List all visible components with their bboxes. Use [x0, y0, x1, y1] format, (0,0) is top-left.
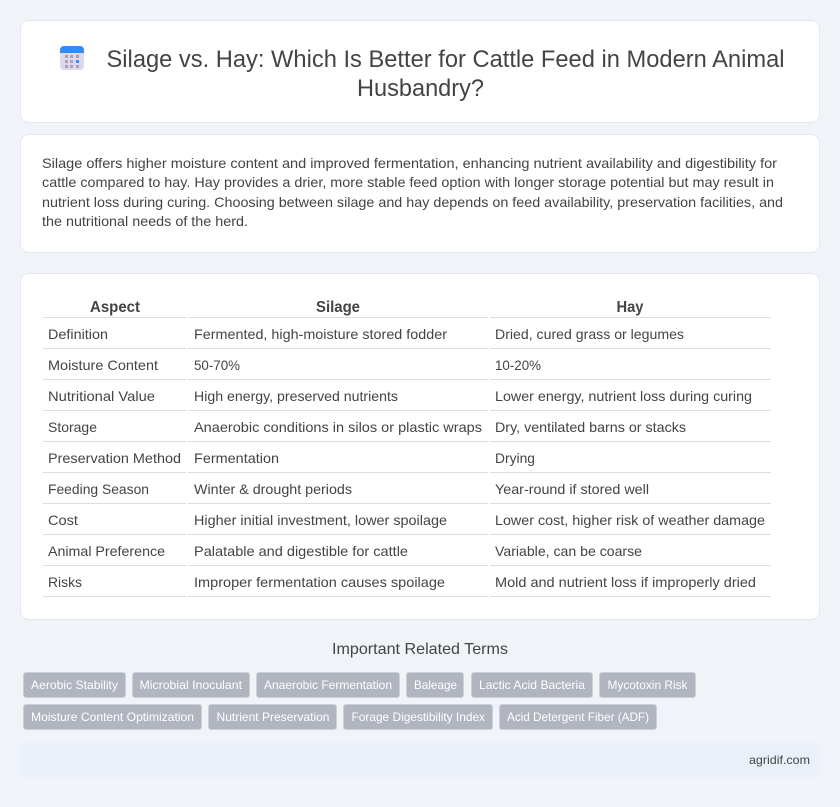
tag	[132, 672, 250, 698]
row: risks: Improper fermentation causes spoilage	[194, 574, 445, 590]
row: risks: Mold and nutrient loss if improperly dried	[495, 574, 756, 590]
row: cost: Lower cost, higher risk of weather damage	[495, 512, 765, 528]
row: risks: Risks	[48, 574, 82, 590]
row: animal preference: Variable, can be coarse	[495, 543, 642, 559]
row: nutritional value: Nutritional Value	[48, 388, 155, 404]
title: Silage vs. Hay: Which Is Better for Cattle Feed in Modern Animal	[106, 46, 784, 73]
row: feeding season: Year-round if stored well	[495, 481, 649, 497]
row: storage: Anaerobic conditions in silos or plastic wraps	[194, 419, 482, 435]
row: cost	[48, 512, 765, 528]
row: cost: Higher initial investment, lower spoilage	[194, 512, 447, 528]
row: nutritional value: Lower energy, nutrient loss during curing	[495, 388, 752, 404]
tag	[24, 672, 126, 698]
row: definition: Definition	[48, 326, 108, 342]
panel: summary paragraph	[20, 134, 820, 252]
row: animal preference: Animal Preference	[48, 543, 165, 559]
footer	[20, 743, 820, 777]
tag	[344, 704, 492, 730]
icon: calendar	[60, 46, 84, 70]
tag: Lactic Acid Bacteria	[479, 678, 585, 692]
table header	[90, 299, 644, 316]
tags: related terms	[24, 672, 696, 730]
row: definition: Fermented, high-moisture stored fodder	[194, 326, 447, 342]
row: moisture content: 10-20%	[495, 357, 541, 373]
row: storage	[48, 419, 686, 435]
table header: Hay	[616, 299, 644, 316]
row: moisture content	[48, 357, 541, 373]
tag: Anaerobic Fermentation	[264, 678, 392, 692]
row: animal preference	[48, 543, 642, 559]
row: preservation method	[48, 450, 535, 466]
tag: Mycotoxin Risk	[608, 678, 688, 692]
row: preservation method: Fermentation	[194, 450, 279, 466]
row: preservation method: Preservation Method	[48, 450, 181, 466]
tag	[472, 672, 592, 698]
panel: comparison table	[20, 274, 820, 620]
tag	[24, 704, 202, 730]
tag	[406, 672, 464, 698]
row: moisture content: Moisture Content	[48, 357, 158, 373]
row: definition	[48, 326, 684, 342]
tag: Baleage	[414, 678, 457, 692]
row: definition: Dried, cured grass or legumes	[495, 326, 684, 342]
tag: Acid Detergent Fiber (ADF)	[507, 710, 649, 724]
tag: Microbial Inoculant	[140, 678, 243, 692]
text block: summary: Silage offers higher moisture content and improved fermentation, enhancing nutrient availability and digestibility for	[42, 155, 777, 171]
row: feeding season: Feeding Season	[48, 481, 149, 497]
row: preservation method: Drying	[495, 450, 535, 466]
text block: summary: nutrient loss during curing. Choosing between silage and hay depends on feed availability, preservation facilities, and	[42, 194, 783, 210]
table header: Aspect	[90, 299, 141, 316]
tag	[256, 672, 400, 698]
tag	[208, 704, 336, 730]
title: Husbandry?	[357, 75, 484, 102]
row: storage: Storage	[48, 419, 97, 435]
panel: title header	[20, 20, 820, 122]
text block: summary: the nutritional needs of the herd.	[42, 213, 248, 229]
tag: Nutrient Preservation	[216, 710, 330, 724]
heading: important related terms: Important Related Terms	[332, 641, 508, 658]
tag: Moisture Content Optimization	[31, 710, 194, 724]
text block: summary: cattle compared to hay. Hay provides a drier, more stable feed option with longer storage potential but may result in	[42, 174, 774, 190]
row: cost: Cost	[48, 512, 78, 528]
tag	[600, 672, 696, 698]
footer: agridif.com	[749, 753, 810, 767]
table rules	[43, 318, 771, 596]
row: risks	[48, 574, 756, 590]
tag: Aerobic Stability	[31, 678, 118, 692]
title	[106, 46, 784, 102]
row: nutritional value	[48, 388, 752, 404]
row: storage: Dry, ventilated barns or stacks	[495, 419, 686, 435]
row: nutritional value: High energy, preserved nutrients	[194, 388, 398, 404]
row: animal preference: Palatable and digestible for cattle	[194, 543, 408, 559]
tag	[500, 704, 656, 730]
tag: Forage Digestibility Index	[352, 710, 485, 724]
row: moisture content: 50-70%	[194, 357, 240, 373]
row: feeding season	[48, 481, 649, 497]
text block: summary	[42, 155, 783, 229]
row: feeding season: Winter & drought periods	[194, 481, 352, 497]
table header: Silage	[316, 299, 360, 316]
